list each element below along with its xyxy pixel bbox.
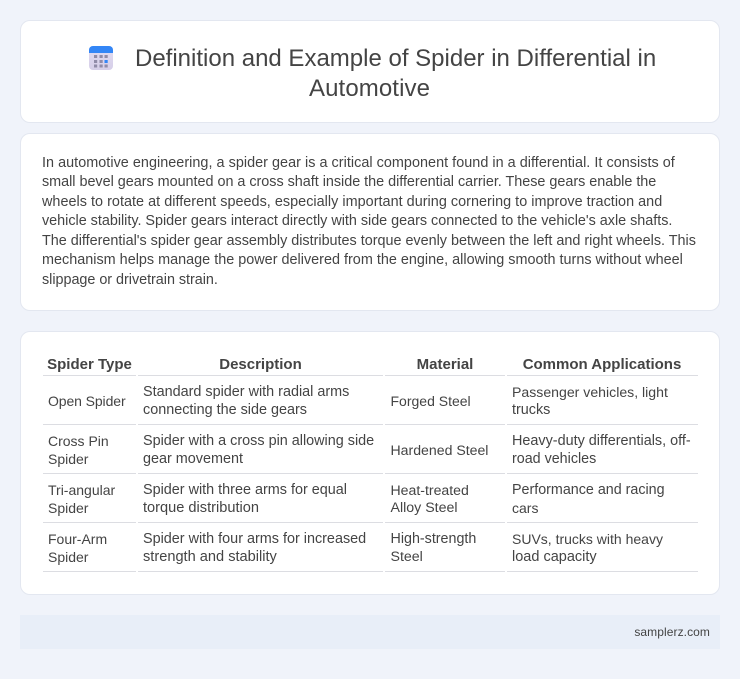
- row: Four-Arm Spider: Four-Arm: [48, 531, 107, 547]
- row: Tri-angular Spider: Spider: [48, 500, 88, 516]
- title: Automotive: [309, 75, 430, 102]
- paragraph: In automotive engineering, a spider gear is a critical component found in a differential. It consists of: [42, 155, 675, 171]
- row: Four-Arm Spider: load capacity: [512, 549, 597, 565]
- row: Cross Pin Spider: Cross Pin: [48, 433, 109, 449]
- paragraph: [42, 155, 696, 288]
- row: Tri-angular Spider: Spider with three arms for equal: [143, 482, 347, 498]
- row: Open Spider: [48, 384, 668, 418]
- table panel: [20, 331, 720, 595]
- row: Cross Pin Spider: Spider with a cross pin allowing side: [143, 433, 374, 449]
- paragraph: vehicle stability. Spider gears interact directly with side gears connected to the vehicle's axle shafts.: [42, 213, 672, 229]
- row: Four-Arm Spider: Spider: [48, 549, 88, 565]
- row: Tri-angular Spider: Alloy Steel: [390, 500, 458, 516]
- table header: Material: [417, 356, 473, 373]
- row: Tri-angular Spider: Tri-angular: [48, 482, 115, 498]
- table header: Common Applications: [523, 356, 681, 373]
- row: Open Spider: Open Spider: [48, 393, 126, 409]
- row: Four-Arm Spider: Steel: [390, 549, 423, 565]
- row: Cross Pin Spider: [48, 433, 691, 467]
- header panel: [20, 20, 720, 123]
- paragraph: The differential's spider gear assembly distributes torque evenly between the left and right wheels. This: [42, 233, 696, 249]
- paragraph: small bevel gears mounted on a cross shaft inside the differential carrier. These gears enable the: [42, 174, 656, 190]
- row: Open Spider: trucks: [512, 402, 550, 418]
- row: Cross Pin Spider: Heavy-duty differentials, off-: [512, 433, 691, 449]
- row: Open Spider: Forged Steel: [390, 393, 471, 409]
- row: Four-Arm Spider: Spider with four arms for increased: [143, 531, 366, 547]
- table header: [47, 356, 681, 373]
- row: Open Spider: connecting the side gears: [143, 402, 307, 418]
- icon: calendar: [89, 46, 113, 70]
- title: Definition and Example of Spider in Differential in: [135, 45, 656, 72]
- row: Open Spider: Passenger vehicles, light: [512, 384, 668, 400]
- row: Cross Pin Spider: gear movement: [143, 451, 243, 467]
- row: Four-Arm Spider: strength and stability: [143, 549, 277, 565]
- row: Cross Pin Spider: Hardened Steel: [390, 442, 488, 458]
- row: Four-Arm Spider: SUVs, trucks with heavy: [512, 531, 663, 547]
- table header: Description: [219, 356, 302, 373]
- row: Tri-angular Spider: [48, 482, 665, 516]
- row: Tri-angular Spider: torque distribution: [143, 500, 259, 516]
- intro text panel: [20, 133, 720, 311]
- row: Tri-angular Spider: Heat-treated: [390, 482, 469, 498]
- row: Open Spider: Standard spider with radial arms: [143, 384, 349, 400]
- table header: Spider Type: [47, 356, 132, 373]
- row: Four-Arm Spider: [48, 531, 663, 565]
- row: Tri-angular Spider: cars: [512, 500, 538, 516]
- paragraph: slippage or drivetrain strain.: [42, 272, 218, 288]
- paragraph: wheels to rotate at different speeds, especially important during cornering to improve traction and: [42, 194, 662, 210]
- row: Cross Pin Spider: Spider: [48, 451, 88, 467]
- table: [43, 356, 698, 572]
- row: Tri-angular Spider: Performance and racing: [512, 482, 665, 498]
- footer text: samplerz.com: [634, 625, 710, 639]
- row: Cross Pin Spider: road vehicles: [512, 451, 596, 467]
- title: [135, 45, 656, 102]
- footer bar: [20, 615, 720, 648]
- row: Four-Arm Spider: High-strength: [390, 531, 476, 547]
- paragraph: mechanism helps manage the power delivered from the engine, allowing smooth turns without wheel: [42, 252, 683, 268]
